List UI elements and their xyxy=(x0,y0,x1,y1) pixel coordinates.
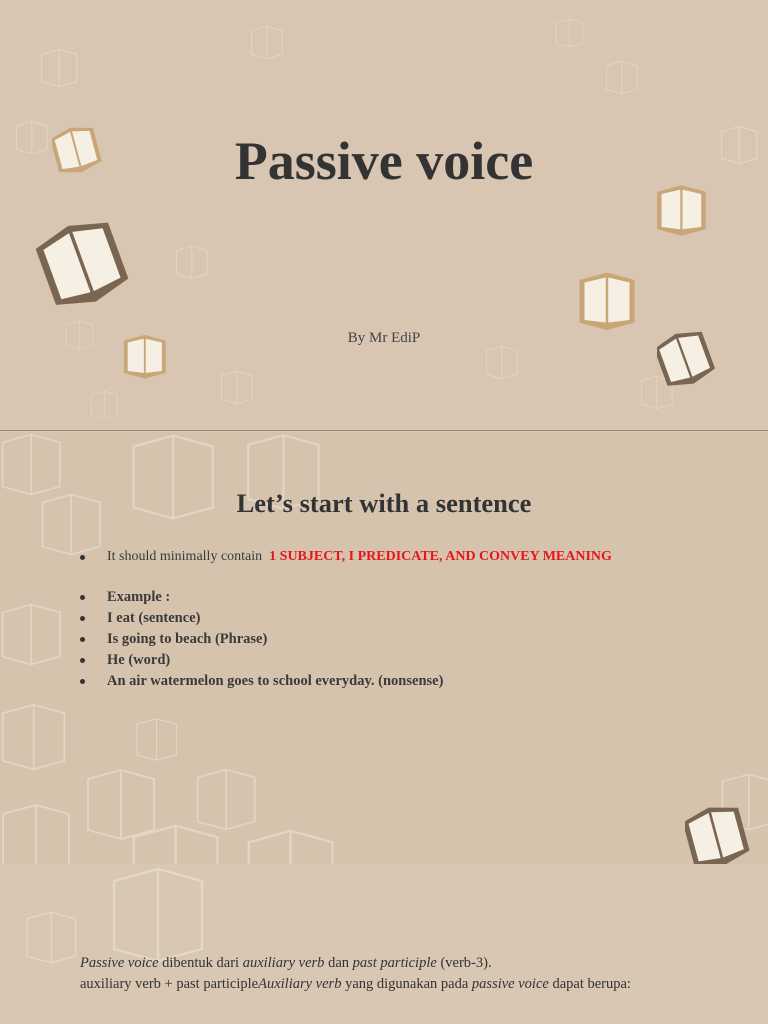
text block: auxiliary verb + past participleAuxiliary verb yang digunakan pada passive voice dapat berupa: xyxy=(80,976,631,992)
icon: dark book bottom right xyxy=(685,808,750,864)
text block: Passive voice dibentuk dari auxiliary verb dan past participle (verb-3). xyxy=(80,955,492,971)
bullet list: Example : xyxy=(107,589,170,605)
icon: large dark book xyxy=(36,222,128,305)
bullet list xyxy=(80,549,612,689)
decorative outline books xyxy=(16,19,758,419)
icon: book small left xyxy=(124,334,166,379)
heading: Let’s start with a sentence xyxy=(237,488,531,518)
decorative outline books xyxy=(26,868,203,964)
bullet list: I eat (sentence) xyxy=(107,610,200,626)
bullet list: He (word) xyxy=(107,652,170,668)
title: Passive voice xyxy=(235,131,533,191)
slide 1: title slide xyxy=(0,0,768,430)
icon: dark book right xyxy=(657,332,715,386)
slide 2: sentence xyxy=(0,432,768,864)
subtitle: By Mr EdiP xyxy=(348,330,420,346)
slide 3: text xyxy=(0,865,768,1024)
icon: book right middle xyxy=(580,272,634,330)
icon: book right upper xyxy=(657,185,706,236)
bullet list: Is going to beach (Phrase) xyxy=(107,631,267,647)
decorative outline books xyxy=(2,434,768,864)
bullet list: An air watermelon goes to school everyday. (nonsense) xyxy=(107,673,443,689)
icon: book top-left xyxy=(52,128,102,172)
bullet list: It should minimally contain 1 SUBJECT, I PREDICATE, AND CONVEY MEANING xyxy=(107,549,612,564)
text block xyxy=(80,955,631,992)
